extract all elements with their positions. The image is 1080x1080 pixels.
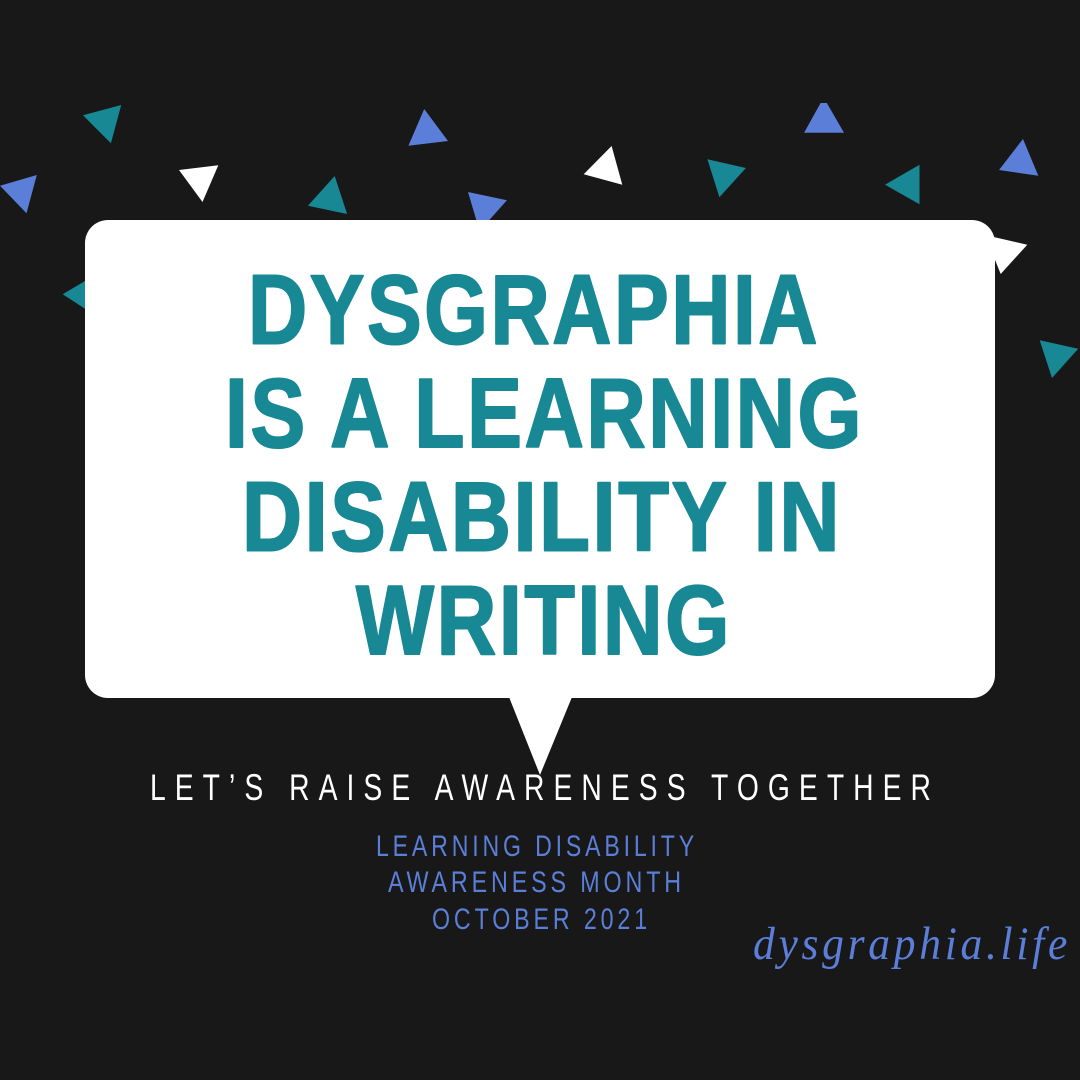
title: IS A LEARNING — [225, 358, 864, 468]
awareness month text: AWARENESS MONTH — [388, 866, 685, 899]
awareness month text: LEARNING DISABILITY — [376, 830, 698, 863]
title — [225, 254, 864, 675]
awareness month text: OCTOBER 2021 — [432, 903, 651, 936]
title: DISABILITY IN — [242, 462, 842, 572]
confetti triangles — [0, 103, 1078, 378]
title: WRITING — [356, 565, 732, 675]
awareness month text — [376, 830, 698, 936]
speech bubble — [85, 220, 995, 775]
title: DYSGRAPHIA — [248, 254, 820, 364]
